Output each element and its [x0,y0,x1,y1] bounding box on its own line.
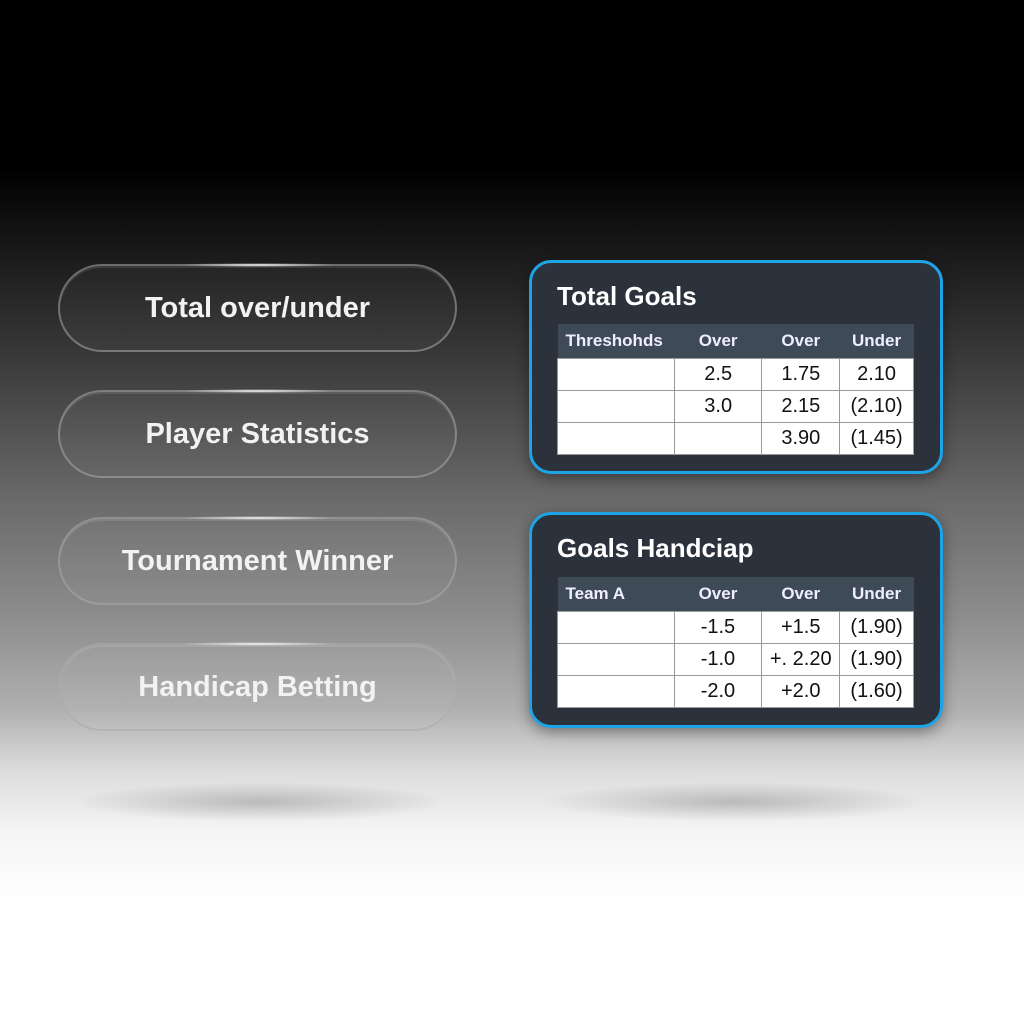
table: handicap odds: Over [781,584,820,603]
table: handicap odds: (1.60) [850,680,903,702]
table: handicap odds: Over [699,584,737,603]
pill: Total over/under [58,264,457,352]
table: handicap odds: Team A [566,584,625,603]
table: handicap odds: -1.5 [701,616,735,638]
heading: Total Goals: Total Goals [557,281,697,311]
table: total goals odds: 3.90 [781,426,820,448]
table: total goals odds: Threshohds [566,331,663,350]
table: total goals odds: (1.45) [850,426,903,448]
pill: Handicap Betting [58,643,457,731]
panel: Goals Handicap [529,512,943,728]
pill: Tournament Winner: Tournament Winner [122,544,393,576]
shadow right [540,782,930,822]
panel: Total Goals [529,260,943,474]
table: total goals odds: Under [852,331,901,350]
table: total goals odds: 1.75 [781,362,820,384]
table: handicap odds: (1.90) [850,616,903,638]
table: total goals odds: 2.10 [857,362,896,384]
table: handicap odds [557,577,914,708]
table: handicap odds: Under [852,584,901,603]
table: total goals odds: 2.5 [704,362,732,384]
table: handicap odds: +2.0 [781,680,820,702]
pill: Handicap Betting: Handicap Betting [138,670,377,702]
table: handicap odds: -1.0 [701,648,735,670]
table: total goals odds: 2.15 [781,394,820,416]
heading: Goals Handciap: Goals Handciap [557,533,754,563]
table: handicap odds: (1.90) [850,648,903,670]
table: total goals odds: (2.10) [850,394,903,416]
pill: Player Statistics [58,390,457,478]
table: total goals odds: 3.0 [704,394,732,416]
pill: Player Statistics: Player Statistics [145,418,370,450]
table: handicap odds: +. 2.20 [770,648,832,670]
table: total goals odds: Over [781,331,820,350]
shadow left [70,782,450,822]
pill: Total over/under: Total over/under [145,292,370,324]
table: total goals odds [557,324,914,455]
table: handicap odds: +1.5 [781,616,820,638]
table: handicap odds: -2.0 [701,680,735,702]
table: total goals odds: Over [699,331,738,350]
pill: Tournament Winner [58,517,457,605]
